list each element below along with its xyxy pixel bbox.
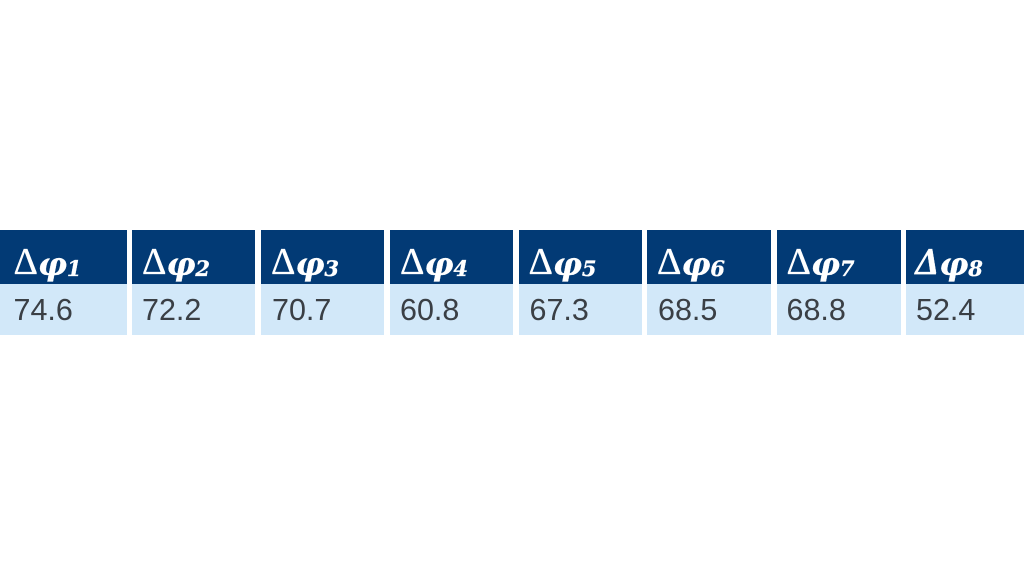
column: delta phi 5: Δφ5 (528, 241, 597, 283)
column: delta phi 2: Δφ2 (142, 241, 210, 283)
column: delta phi 8: 52.4 (916, 292, 975, 326)
column: delta phi 8 (906, 230, 1024, 335)
column: delta phi 4: Δφ4 (400, 241, 468, 283)
column: delta phi 5: 67.3 (530, 292, 589, 326)
column: delta phi 1 (0, 230, 127, 335)
column: delta phi 3 (261, 230, 384, 335)
column: delta phi 2 (132, 230, 255, 335)
column: delta phi 6: 68.5 (658, 292, 717, 326)
column: delta phi 3: 70.7 (272, 292, 331, 326)
column: delta phi 7 (777, 230, 901, 335)
column: delta phi 2: 72.2 (142, 292, 201, 326)
column: delta phi 8: Δφ8 (916, 241, 983, 283)
column: delta phi 6: Δφ6 (657, 241, 725, 283)
column: delta phi 7: Δφ7 (786, 241, 855, 283)
column: delta phi 4: 60.8 (400, 292, 459, 326)
column: delta phi 3: Δφ3 (271, 241, 339, 283)
data table (0, 230, 1024, 335)
column: delta phi 1: Δφ1 (14, 241, 82, 283)
column: delta phi 6 (647, 230, 771, 335)
column: delta phi 1: 74.6 (14, 292, 73, 326)
column: delta phi 4 (390, 230, 513, 335)
column: delta phi 7: 68.8 (786, 292, 846, 326)
column: delta phi 5 (519, 230, 642, 335)
